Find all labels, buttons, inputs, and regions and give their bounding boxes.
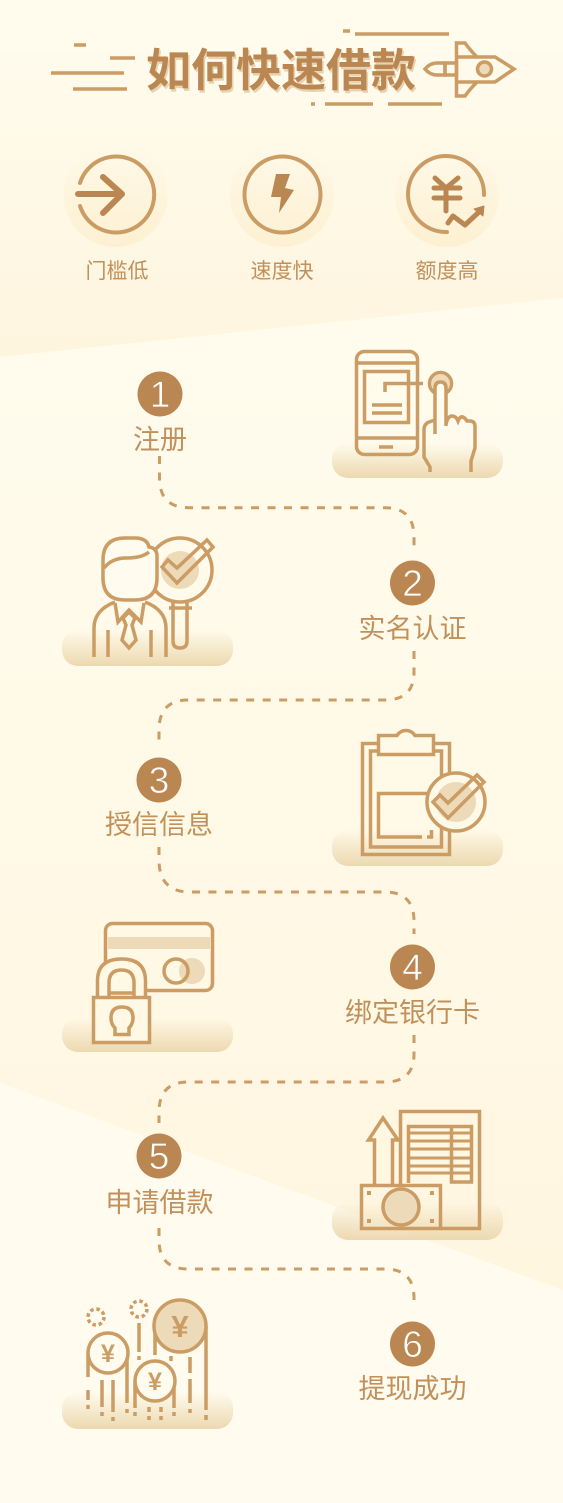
icon: phone and hand	[356, 352, 475, 472]
step 5 label: 申请借款	[106, 1188, 214, 1218]
step 4 label: 绑定银行卡	[345, 998, 480, 1028]
step 2 marker: 2	[402, 563, 423, 604]
step 3 marker: 3	[149, 760, 169, 801]
dashed path 4 to 5	[159, 1035, 414, 1123]
dashed path 3 to 4	[159, 847, 414, 934]
icon: yen coins	[88, 1300, 206, 1421]
pedestal 3	[332, 830, 503, 866]
icon: person with magnifier	[94, 538, 213, 657]
feature: fast	[230, 143, 334, 283]
step 6 label: 提现成功	[358, 1374, 466, 1404]
step 4 marker	[390, 944, 435, 990]
icon: rocket	[425, 43, 514, 96]
title: 如何快速借款	[147, 48, 418, 98]
step 3 label: 授信信息	[105, 810, 213, 840]
pedestal 4	[62, 1018, 233, 1052]
label: 速度快: 速度快	[250, 260, 314, 283]
icon: bank card with lock	[94, 924, 212, 1042]
label: 额度高: 额度高	[416, 260, 478, 283]
icon: document, upward arrow and banknote	[362, 1112, 480, 1228]
icon: clipboard with check	[362, 730, 485, 854]
step 6 marker: 6	[402, 1324, 423, 1365]
step 5 marker: 5	[149, 1136, 169, 1177]
step 5 marker	[136, 1134, 182, 1178]
dashed path 5 to 6	[159, 1228, 414, 1304]
yen symbol left: ¥	[101, 1340, 115, 1368]
step 3 marker	[136, 758, 182, 802]
feature: high limit	[395, 143, 499, 283]
pedestal 1	[332, 443, 503, 478]
yen symbol small: ¥	[148, 1368, 162, 1396]
step 2 marker	[390, 560, 435, 606]
icon: yen with trend	[408, 156, 484, 232]
icon: lightning in ring	[244, 156, 320, 232]
step 6 marker	[390, 1322, 435, 1366]
pedestal 5	[332, 1202, 503, 1240]
step 1 label: 注册	[133, 425, 187, 455]
header decoration: speed lines	[51, 31, 449, 104]
feature: low threshold	[64, 143, 168, 283]
pedestal 6	[62, 1392, 233, 1429]
step 1 marker	[138, 372, 182, 416]
step 2 label: 实名认证	[358, 614, 466, 644]
yen symbol large: ¥	[171, 1309, 189, 1344]
label: 门槛低: 门槛低	[86, 260, 148, 283]
dashed path 1 to 2	[160, 456, 414, 550]
step 4 marker: 4	[402, 947, 423, 988]
dashed path 2 to 3	[159, 651, 414, 745]
step 1 marker: 1	[150, 374, 170, 415]
title: 如何快速借款	[146, 45, 416, 96]
icon: arrow in ring	[78, 156, 154, 232]
pedestal 2	[62, 630, 233, 666]
